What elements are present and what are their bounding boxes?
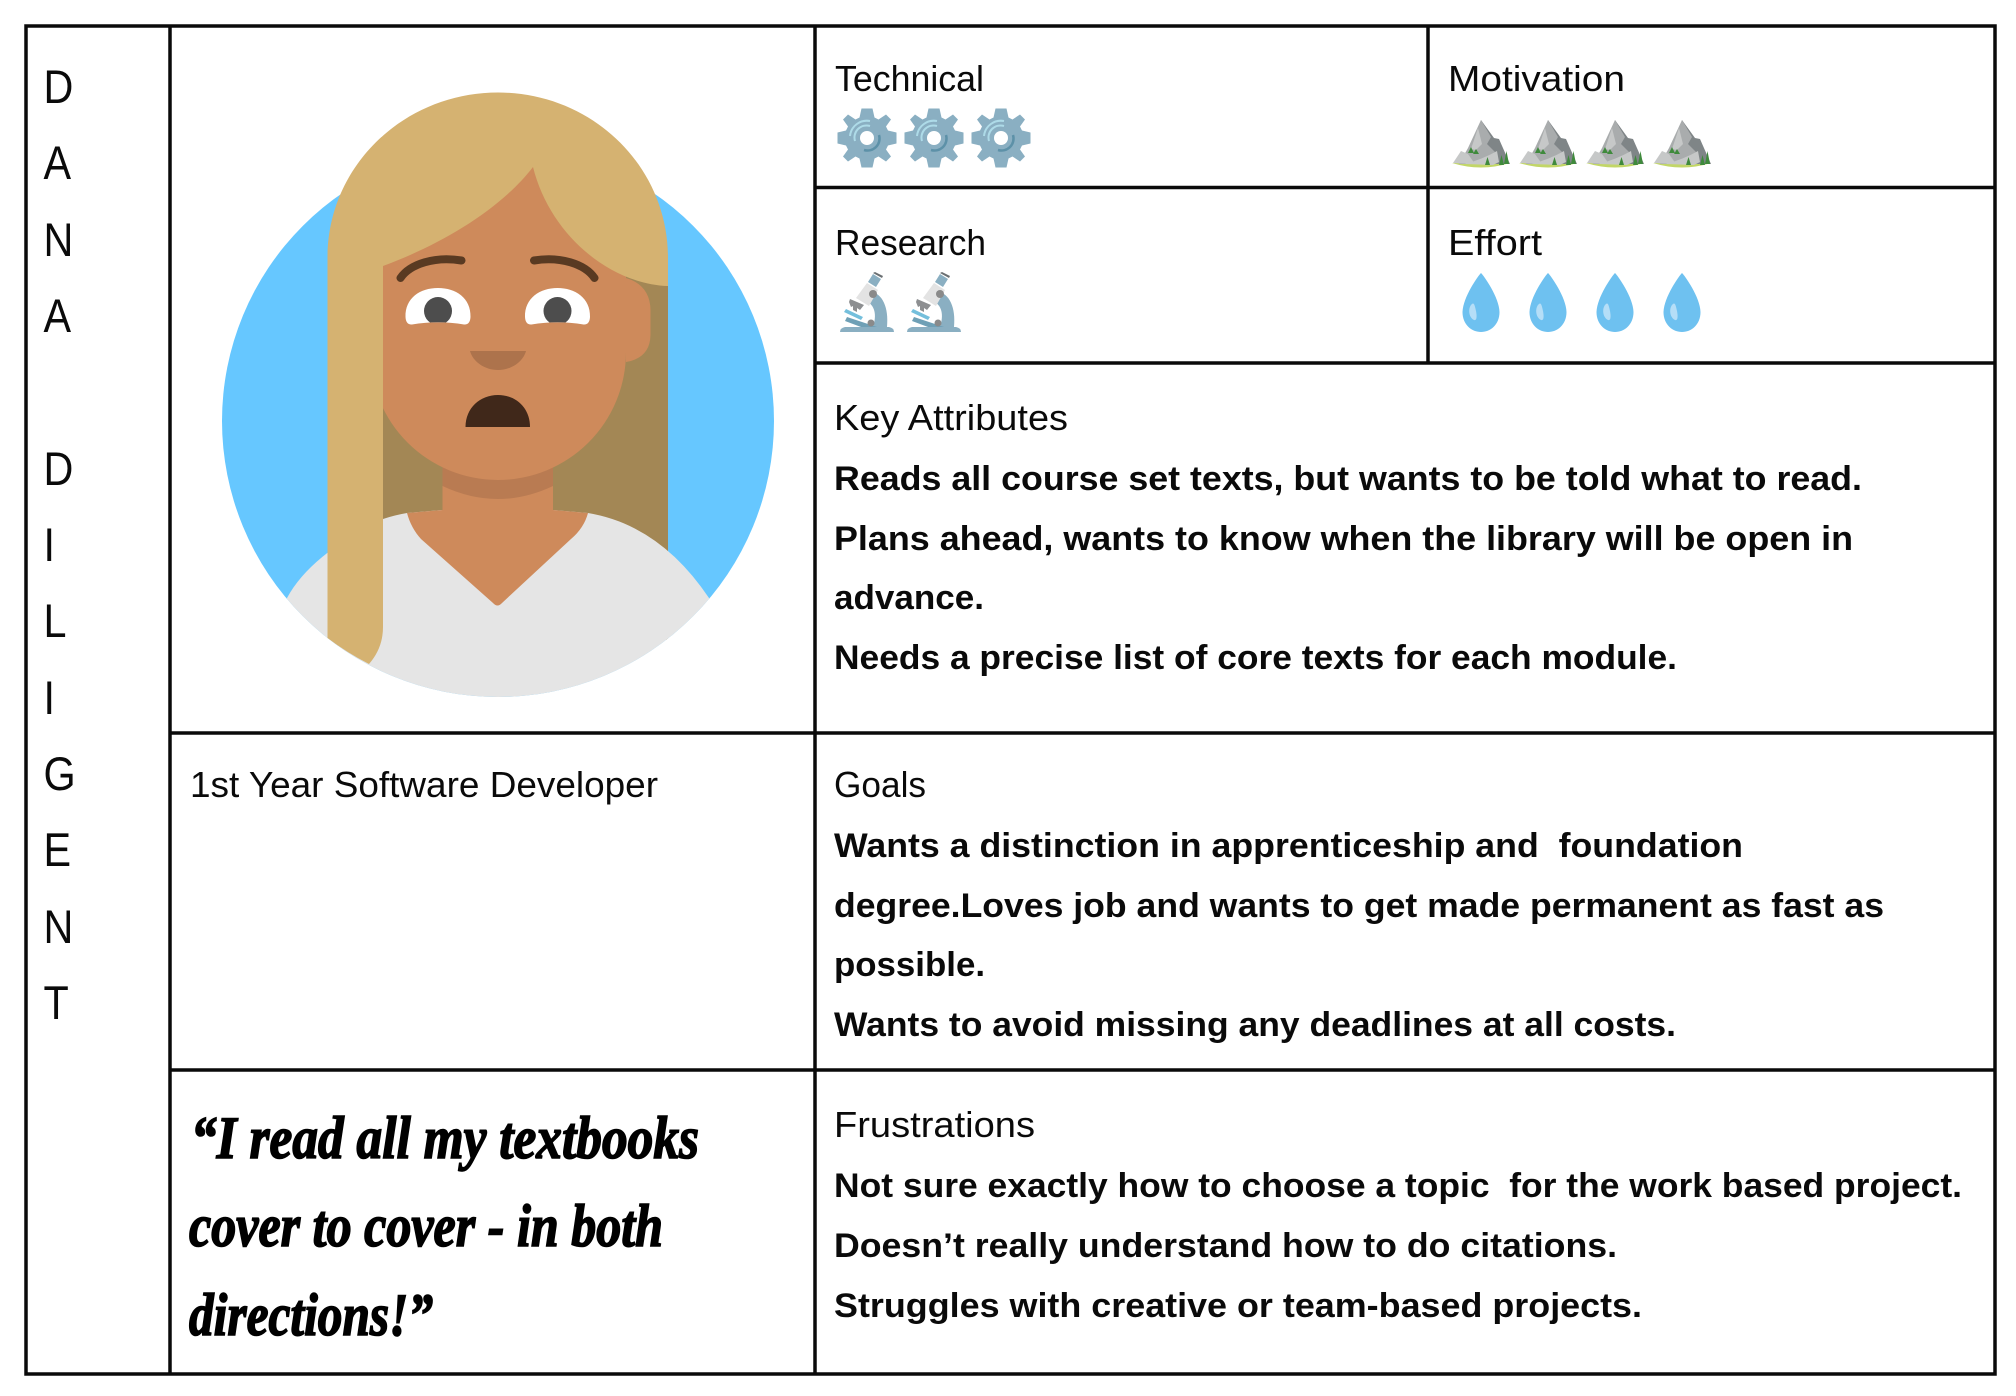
rating: motivation <box>1448 58 1711 168</box>
panel: key attributes: Reads all course set texts, but wants to be told what to read. <box>834 460 1862 498</box>
quote: cover to cover - in both <box>189 1193 663 1259</box>
rating: research: Research <box>835 222 986 263</box>
panel: goals: Wants to avoid missing any deadlines at all costs. <box>834 1006 1676 1044</box>
role label: 1st Year Software Developer <box>190 764 658 805</box>
vertical title: Dana Diligent: G <box>44 749 76 801</box>
panel: goals <box>834 764 1884 1044</box>
panel: key attributes: Key Attributes <box>834 397 1068 438</box>
portrait avatar <box>222 92 774 720</box>
panel: key attributes: Plans ahead, wants to know when the library will be open in <box>834 520 1853 558</box>
icons: four mountains <box>1452 120 1711 168</box>
vertical title: Dana Diligent: A <box>44 291 72 343</box>
rating: technical <box>835 58 1030 168</box>
panel: goals: degree.Loves job and wants to get made permanent as fast as <box>834 887 1884 925</box>
vertical title: Dana Diligent: N <box>44 215 73 267</box>
quote: “I read all my textbooks <box>191 1105 699 1171</box>
panel: goals: Goals <box>834 764 926 805</box>
panel: frustrations: Not sure exactly how to choose a topic for the work based project. <box>834 1167 1962 1205</box>
vertical title: Dana Diligent: D <box>44 62 73 114</box>
rating: effort: Effort <box>1448 222 1542 263</box>
icons: two microscopes <box>840 272 961 332</box>
rating: technical: Technical <box>835 58 984 99</box>
vertical title: Dana Diligent: E <box>44 825 71 877</box>
icons: three gears <box>838 108 1030 168</box>
vertical title: Dana Diligent: T <box>44 978 69 1030</box>
panel: key attributes <box>834 397 1862 677</box>
panel: key attributes: advance. <box>834 579 984 617</box>
quote <box>189 1105 699 1348</box>
vertical title: Dana Diligent: L <box>44 596 67 648</box>
vertical title: Dana Diligent: N <box>44 902 73 954</box>
vertical title: Dana Diligent: I <box>44 520 55 572</box>
vertical title: Dana Diligent: A <box>44 138 72 190</box>
panel: frustrations: Struggles with creative or team-based projects. <box>834 1287 1642 1325</box>
quote: directions!” <box>189 1282 433 1348</box>
panel: frustrations: Frustrations <box>834 1104 1035 1145</box>
rating: motivation: Motivation <box>1448 58 1625 99</box>
panel: goals: possible. <box>834 946 985 984</box>
panel: frustrations <box>834 1104 1962 1325</box>
panel: key attributes: Needs a precise list of core texts for each module. <box>834 639 1677 677</box>
vertical title: Dana Diligent: D <box>44 444 73 496</box>
panel: goals: Wants a distinction in apprenticeship and foundation <box>834 827 1743 865</box>
rating: research <box>835 222 986 332</box>
vertical title: Dana Diligent <box>44 62 76 1030</box>
rating: effort <box>1448 222 1700 332</box>
vertical title: Dana Diligent: I <box>44 673 55 725</box>
panel: frustrations: Doesn’t really understand how to do citations. <box>834 1227 1617 1265</box>
icons: four water drops <box>1462 273 1700 332</box>
